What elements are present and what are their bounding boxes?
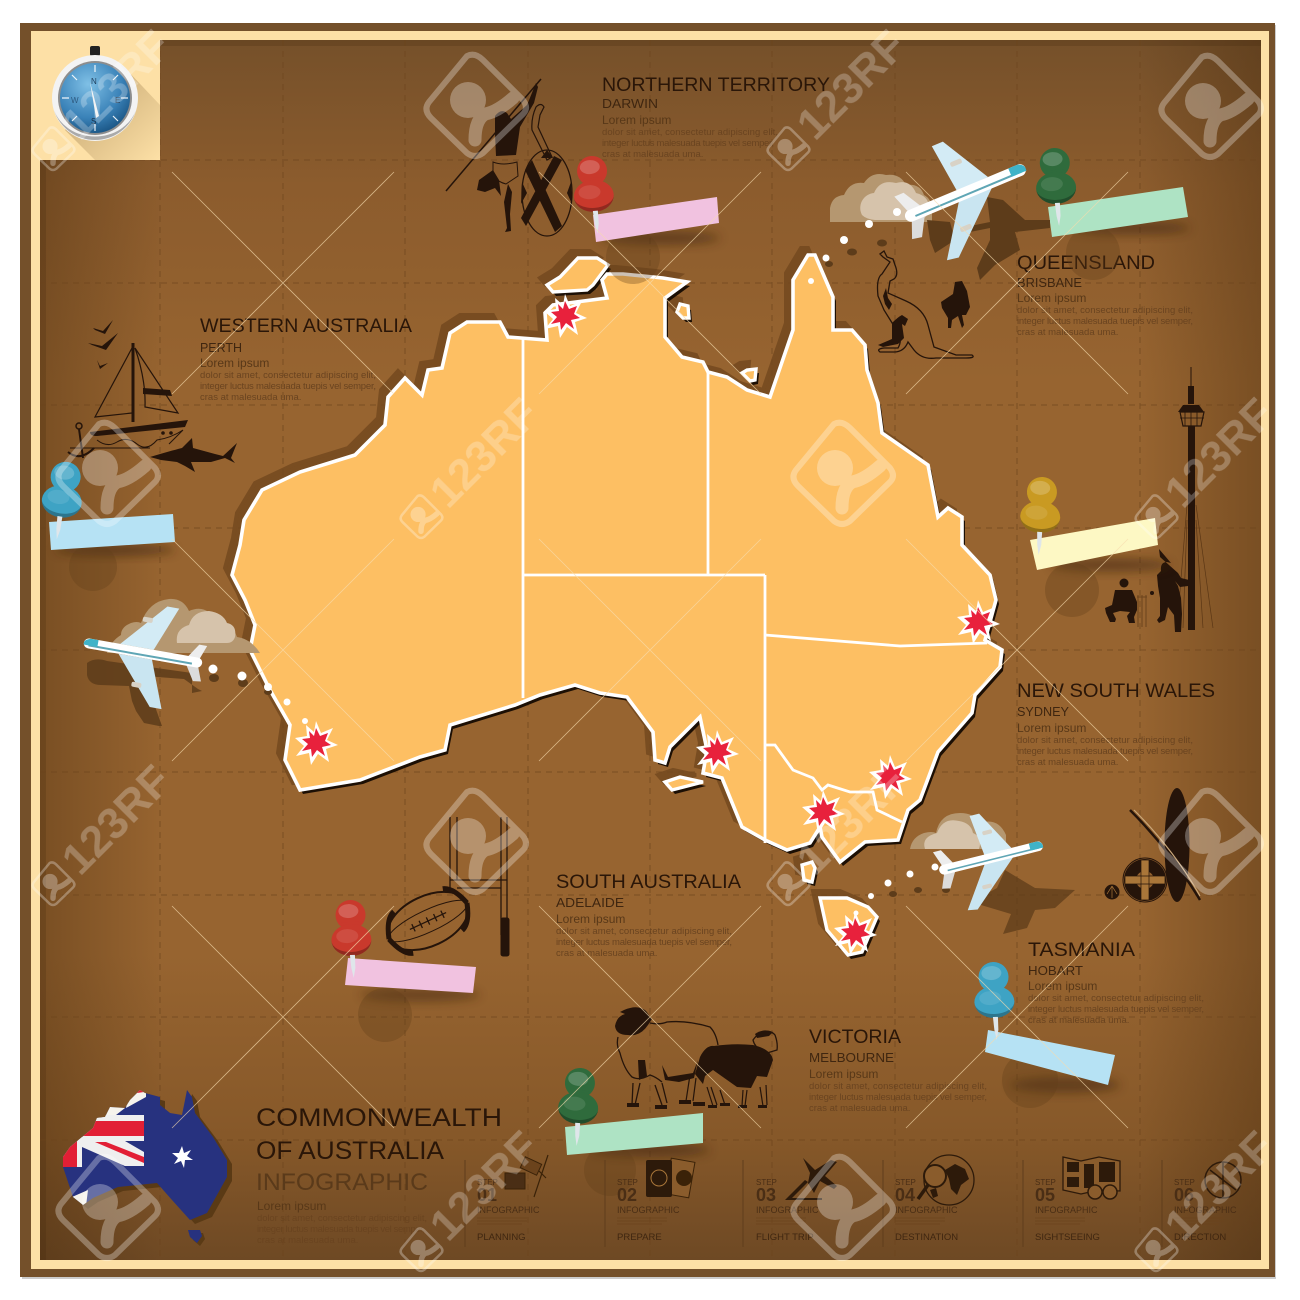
- heading: Victoria: Lorem ipsum: [809, 1067, 878, 1081]
- map fold shadow: [225, 248, 1005, 959]
- title block: OF AUSTRALIA: [256, 1137, 444, 1165]
- icon: passports: [646, 1158, 695, 1198]
- title block: cras at malesuada uma.: [257, 1235, 358, 1246]
- step 03 flight trip: FLIGHT TRIP: [756, 1232, 814, 1243]
- heading: South Australia: [556, 872, 741, 959]
- step 06 direction: DIRECTION: [1174, 1232, 1226, 1243]
- heading: South Australia: integer luctus malesuada tuepis vel semper,: [556, 937, 732, 948]
- icon: compass: [52, 46, 138, 141]
- watermark logos: 123RF: [1155, 389, 1283, 517]
- heading: Northern Territory: cras at malesuada uma.: [602, 149, 703, 160]
- step 01 planning: STEP: [477, 1178, 498, 1187]
- step 06 direction: INFOGRAPHIC: [1174, 1205, 1237, 1215]
- step 05 sightseeing: SIGHTSEEING: [1035, 1232, 1100, 1243]
- heading: Western Australia: dolor sit amet, consectetur adipiscing elit,: [200, 370, 376, 381]
- flag map of Australia: [63, 1090, 232, 1246]
- title block: [256, 1104, 502, 1246]
- step 02 prepare: PREPARE: [617, 1232, 662, 1243]
- heading: Tasmania: TASMANIA: [1028, 940, 1135, 961]
- cloud: [910, 813, 1006, 849]
- heading: Western Australia: [200, 316, 412, 403]
- cloud: [830, 174, 932, 222]
- step 01 planning: INFOGRAPHIC: [477, 1205, 540, 1215]
- heading: New South Wales: Lorem ipsum: [1017, 721, 1086, 735]
- heading: Victoria: [809, 1027, 987, 1114]
- heading: Tasmania: HOBART: [1028, 963, 1083, 978]
- pin note: Queensland: [1034, 147, 1190, 280]
- heading: Victoria: cras at malesuada uma.: [809, 1103, 910, 1114]
- title block: integer luctus malesuada tuepis vel semper,: [257, 1224, 425, 1235]
- heading: Northern Territory: Lorem ipsum: [602, 113, 671, 127]
- title block: Lorem ipsum: [257, 1199, 326, 1213]
- heading: Queensland: integer luctus malesuada tuepis vel semper,: [1017, 316, 1193, 327]
- heading: South Australia: SOUTH AUSTRALIA: [556, 872, 741, 893]
- icon: tourist map with coins: [1063, 1157, 1120, 1199]
- icon: suitcase and clipboard: [505, 1155, 548, 1197]
- step 02 prepare: [605, 1158, 695, 1247]
- icon: plane taking off: [784, 1158, 837, 1200]
- heading: South Australia: ADELAIDE: [556, 895, 624, 910]
- icon: cricket players: [1105, 549, 1189, 632]
- aircraft: [75, 593, 213, 715]
- heading: Western Australia: WESTERN AUSTRALIA: [200, 316, 412, 337]
- icon: compass: W: [71, 96, 79, 105]
- plane: south-east with cloud and trail: [854, 801, 1075, 934]
- map states: [232, 255, 1002, 955]
- watermark logos: 123RF: [787, 756, 915, 884]
- watermark logos: 123RF: [420, 389, 548, 517]
- icon: compass: N: [91, 77, 97, 86]
- watermark logos: 123RF: [52, 21, 180, 149]
- icon: compass: S: [91, 117, 96, 126]
- heading: Western Australia: PERTH: [200, 340, 242, 355]
- heading: Queensland: BRISBANE: [1017, 275, 1082, 290]
- heading: Victoria: integer luctus malesuada tuepis vel semper,: [809, 1092, 987, 1103]
- step 06 direction: STEP: [1174, 1178, 1195, 1187]
- map of Australia: [225, 248, 1005, 959]
- heading: Queensland: cras at malesuada uma.: [1017, 327, 1118, 338]
- heading: South Australia: dolor sit amet, consectetur adipiscing elit,: [556, 926, 732, 937]
- heading: Northern Territory: dolor sit amet, consectetur adipiscing elit,: [602, 127, 778, 138]
- title block: INFOGRAPHIC: [256, 1169, 428, 1196]
- watermark logos: 123RF: [52, 756, 180, 884]
- step 04 destination: 04: [895, 1185, 915, 1205]
- heading: Victoria: MELBOURNE: [809, 1050, 894, 1065]
- step 05 sightseeing: INFOGRAPHIC: [1035, 1205, 1098, 1215]
- heading: New South Wales: SYDNEY: [1017, 704, 1069, 719]
- heading: Queensland: [1017, 253, 1193, 338]
- step 03 flight trip: 03: [756, 1185, 776, 1205]
- step 06 direction: [1162, 1160, 1241, 1247]
- step 04 destination: [883, 1155, 974, 1247]
- step 05 sightseeing: 05: [1035, 1185, 1055, 1205]
- step 02 prepare: STEP: [617, 1178, 638, 1187]
- step 02 prepare: 02: [617, 1185, 637, 1205]
- capital city markers: [295, 294, 1000, 955]
- heading: Queensland: dolor sit amet, consectetur adipiscing elit,: [1017, 305, 1193, 316]
- heading: South Australia: Lorem ipsum: [556, 912, 625, 926]
- heading: Queensland: QUEENSLAND: [1017, 253, 1155, 274]
- heading: Victoria: dolor sit amet, consectetur adipiscing elit,: [809, 1081, 987, 1092]
- heading: Tasmania: [1028, 940, 1204, 1026]
- step 05 sightseeing: STEP: [1035, 1178, 1056, 1187]
- heading: New South Wales: NEW SOUTH WALES: [1017, 681, 1215, 702]
- heading: Northern Territory: integer luctus malesuada tuepis vel semper,: [602, 138, 774, 149]
- step 05 sightseeing: [1023, 1157, 1120, 1247]
- step 02 prepare: INFOGRAPHIC: [617, 1205, 680, 1215]
- icon: aboriginal warrior with shield: [446, 79, 572, 236]
- step 01 planning: 01: [477, 1185, 497, 1205]
- pin note: Victoria: [556, 1067, 710, 1196]
- heading: Northern Territory: NORTHERN TERRITORY: [602, 75, 830, 96]
- heading: Tasmania: integer luctus malesuada tuepis vel semper,: [1028, 1004, 1204, 1015]
- title block: COMMONWEALTH: [256, 1104, 502, 1132]
- pin note: Tasmania: [973, 961, 1120, 1108]
- heading: Western Australia: Lorem ipsum: [200, 356, 269, 370]
- plane: north-east with cloud and trail: [808, 116, 1050, 284]
- icon: sailboat, anchor and shark: [68, 320, 237, 472]
- watermark logos: 123RF: [420, 1122, 548, 1250]
- icon: rugby goal and ball: [378, 817, 509, 962]
- heading: Northern Territory: DARWIN: [602, 96, 658, 111]
- icon: kangaroo with joey: [878, 251, 973, 358]
- heading: Northern Territory: [602, 75, 830, 160]
- heading: Queensland: Lorem ipsum: [1017, 291, 1086, 305]
- watermark logos: 123RF: [787, 21, 915, 149]
- step 03 flight trip: [743, 1158, 837, 1247]
- heading: Western Australia: cras at malesuada uma.: [200, 392, 301, 403]
- icon: globe and magnifier: [918, 1155, 974, 1205]
- heading: South Australia: cras at malesuada uma.: [556, 948, 657, 959]
- heading: Tasmania: Lorem ipsum: [1028, 979, 1097, 993]
- pin note: New South Wales: [1018, 476, 1170, 617]
- heading: Victoria: VICTORIA: [809, 1027, 901, 1048]
- step 01 planning: PLANNING: [477, 1232, 526, 1243]
- heading: Western Australia: integer luctus malesuada tuepis vel semper,: [200, 381, 376, 392]
- step 01 planning: [465, 1155, 548, 1247]
- heading: New South Wales: [1017, 681, 1215, 768]
- step 03 flight trip: INFOGRAPHIC: [756, 1205, 819, 1215]
- plane: west with cloud and trail: [75, 593, 308, 726]
- heading: New South Wales: dolor sit amet, consectetur adipiscing elit,: [1017, 735, 1193, 746]
- icon: surfboards and lifebuoy: [1104, 788, 1200, 902]
- heading: New South Wales: cras at malesuada uma.: [1017, 757, 1118, 768]
- heading: Tasmania: dolor sit amet, consectetur adipiscing elit,: [1028, 993, 1204, 1004]
- step 06 direction: 06: [1174, 1185, 1194, 1205]
- pin note: Northern Territory: [571, 155, 720, 284]
- pin note: South Australia: [330, 899, 480, 1042]
- icon: sheep: [615, 1007, 777, 1109]
- watermark crosses: [172, 172, 1128, 1128]
- heading: New South Wales: integer luctus malesuada tuepis vel semper,: [1017, 746, 1193, 757]
- icon: compass: E: [115, 96, 120, 105]
- icon: Sydney tower: [1177, 367, 1213, 630]
- title block: dolor sit amet, consectetur adipiscing elit,: [257, 1213, 427, 1224]
- compass card: [40, 40, 160, 160]
- heading: Tasmania: cras at malesuada uma.: [1028, 1015, 1129, 1026]
- step 04 destination: INFOGRAPHIC: [895, 1205, 958, 1215]
- icon: compass outline: [1205, 1162, 1241, 1198]
- watermark logos: 123RF: [1155, 1122, 1283, 1250]
- step 03 flight trip: STEP: [756, 1178, 777, 1187]
- step 04 destination: STEP: [895, 1178, 916, 1187]
- pin note: Western Australia: [36, 459, 175, 591]
- step 04 destination: DESTINATION: [895, 1232, 958, 1243]
- cloud: [107, 599, 260, 653]
